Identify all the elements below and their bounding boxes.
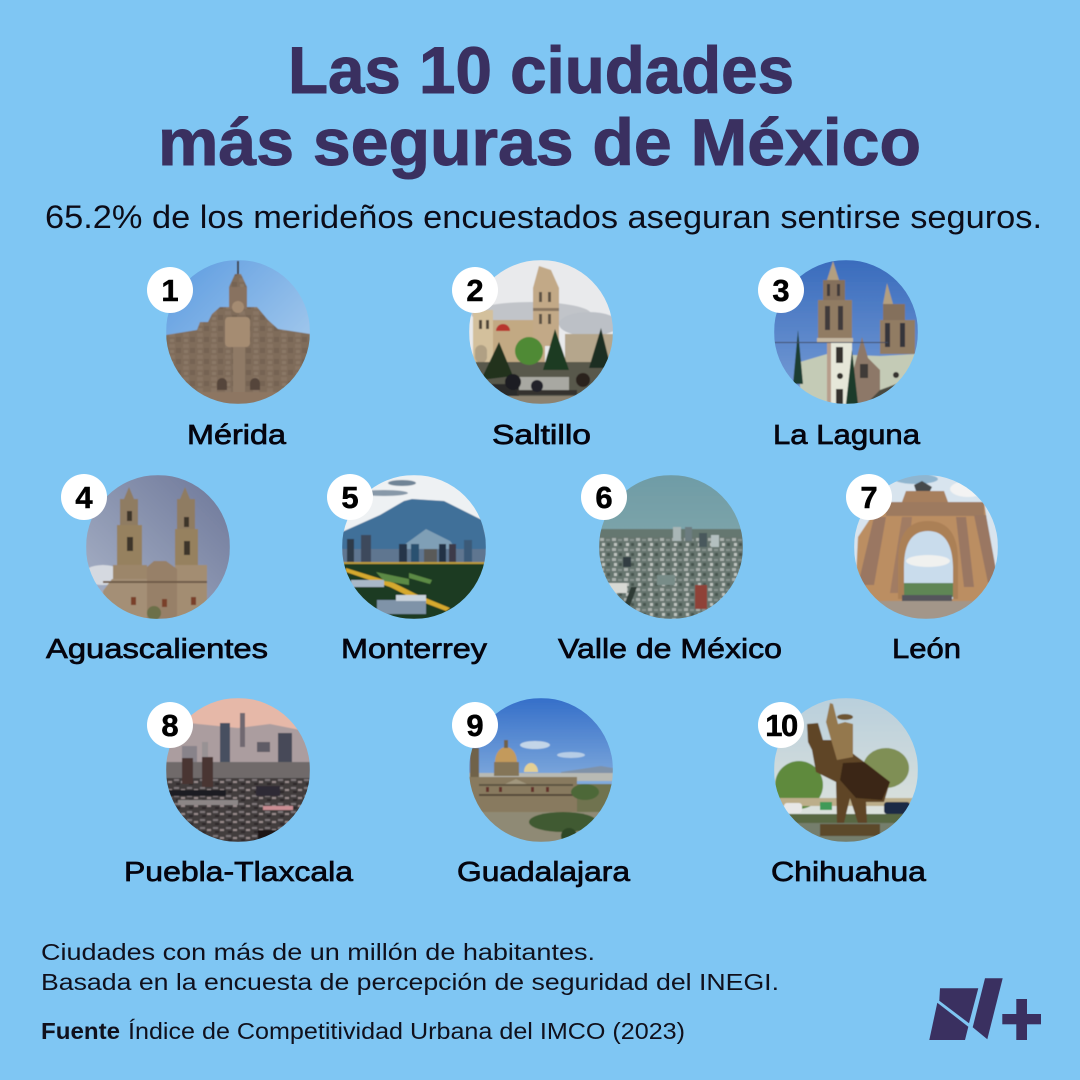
badge 8: [147, 702, 193, 748]
photo: Catedral de Saltillo: [469, 260, 619, 404]
photo: Cerro de la Silla: [342, 475, 486, 619]
name: Chihuahua: [771, 856, 927, 887]
badge 3: 3: [772, 273, 790, 308]
photo: Arco de León: [854, 474, 998, 619]
badge 9: 9: [466, 708, 484, 743]
source: Índice de Competitividad Urbana del IMCO (2023): [128, 1018, 685, 1044]
city 10: Chihuahua: [758, 698, 927, 887]
photo: Catedral de Guadalajara: [469, 698, 613, 844]
name: Mérida: [187, 419, 287, 450]
badge 1: [147, 267, 193, 313]
source: Fuente: [41, 1018, 120, 1044]
city 7: León: [846, 474, 998, 664]
photo: Monumento a la Patria: [166, 260, 310, 404]
badge 6: 6: [595, 480, 613, 515]
name: Aguascalientes: [46, 633, 268, 664]
badge 10: 10: [765, 708, 797, 743]
badge 4: [61, 474, 107, 520]
badge 2: [452, 267, 498, 313]
city 4: Aguascalientes: [46, 474, 268, 664]
badge 6: [581, 474, 627, 520]
city 2: Saltillo: [452, 260, 619, 450]
footnote: [41, 939, 779, 995]
city 9: Guadalajara: [452, 698, 631, 887]
name: Puebla-Tlaxcala: [124, 856, 354, 887]
photo: Catedral de Aguascalientes: [83, 475, 230, 620]
badge 8: 8: [161, 708, 179, 743]
name: Valle de México: [558, 633, 782, 664]
logo: N+: [929, 978, 1041, 1040]
badge 1: 1: [161, 273, 179, 308]
title: [158, 33, 921, 179]
badge 5: [327, 474, 373, 520]
city 8: Puebla-Tlaxcala: [124, 698, 354, 887]
title: Las 10 ciudades: [288, 33, 794, 107]
city 5: Monterrey: [327, 474, 487, 664]
name: La Laguna: [773, 419, 921, 450]
badge 7: 7: [860, 480, 878, 515]
badge 4: 4: [75, 480, 93, 515]
badge 2: 2: [466, 273, 484, 308]
photo: Puebla: [166, 698, 310, 842]
name: Monterrey: [341, 633, 487, 664]
badge 9: [452, 702, 498, 748]
badge 5: 5: [341, 480, 359, 515]
subtitle: 65.2% de los merideños encuestados aseguran sentirse seguros.: [45, 199, 1042, 235]
name: León: [892, 633, 961, 664]
city 6: Valle de México: [558, 474, 782, 664]
badge 10: [758, 702, 804, 748]
footnote: Ciudades con más de un millón de habitantes.: [41, 939, 595, 965]
city 1: Mérida: [147, 260, 310, 450]
city 3: La Laguna: [758, 260, 921, 450]
name: Saltillo: [492, 419, 591, 450]
photo: monumento ecuestre: [774, 698, 918, 842]
badge 7: [846, 474, 892, 520]
footnote: Basada en la encuesta de percepción de seguridad del INEGI.: [41, 969, 779, 995]
photo: Catedral de Torreón: [774, 260, 918, 404]
photo: Ciudad de México: [599, 475, 743, 619]
badge 3: [758, 267, 804, 313]
name: Guadalajara: [457, 856, 631, 887]
title: más seguras de México: [158, 105, 921, 179]
